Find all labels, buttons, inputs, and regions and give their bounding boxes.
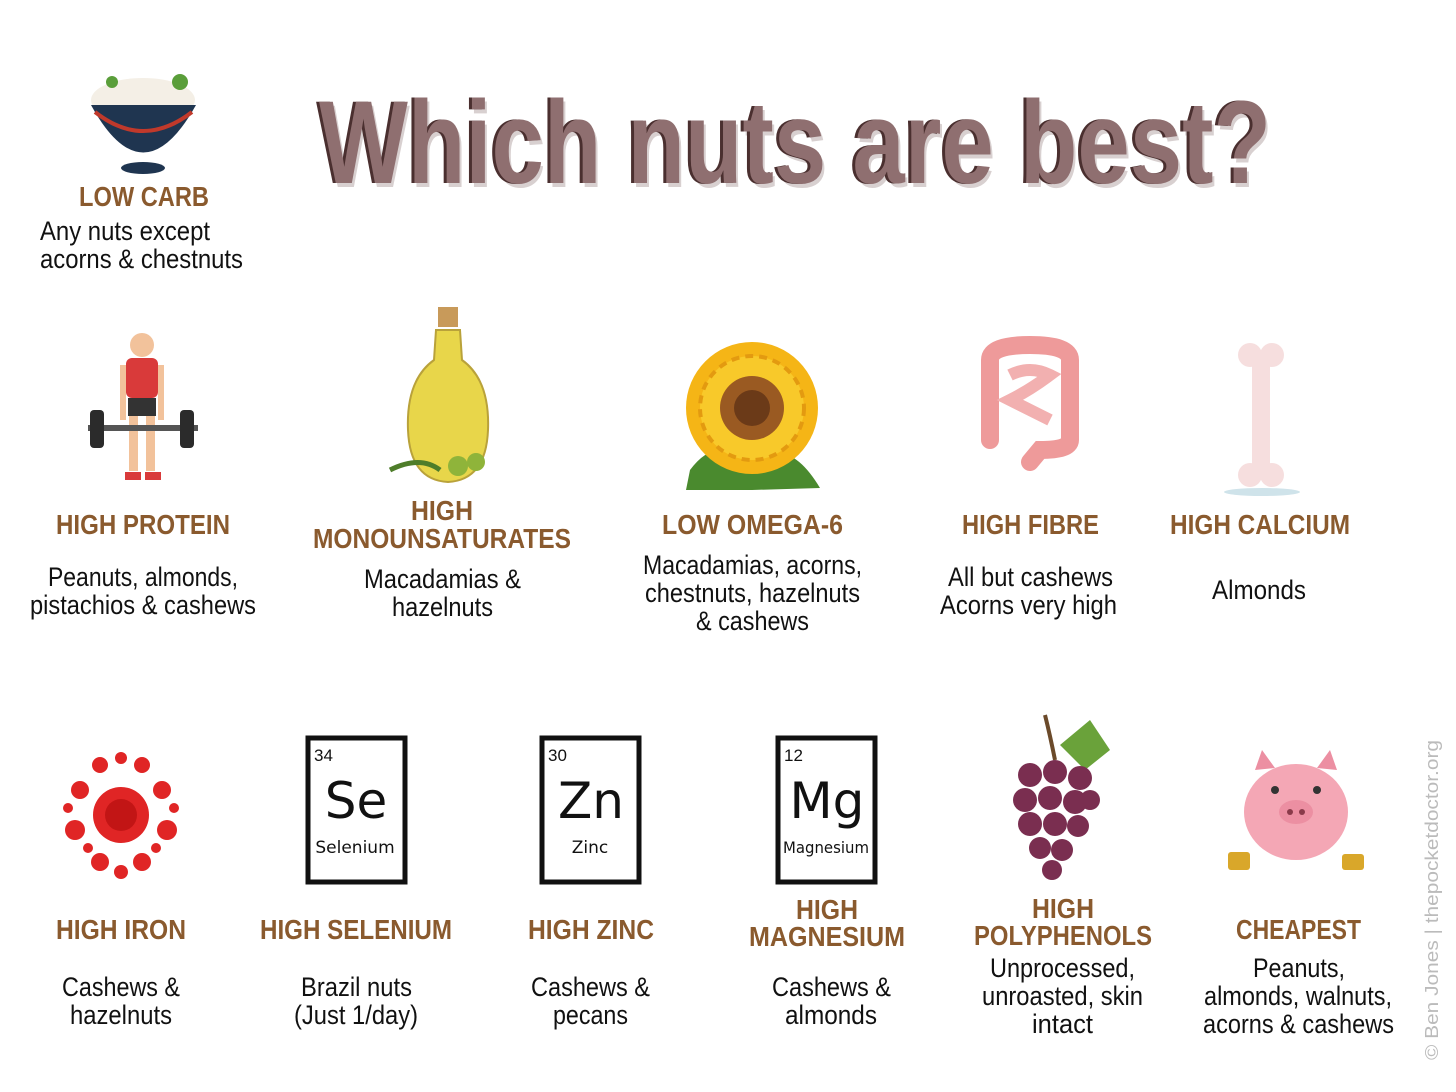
panel: high monounsaturates: Macadamias & — [364, 564, 521, 594]
panel: high fibre — [940, 345, 1117, 620]
panel: high monounsaturates: HIGH — [411, 495, 473, 526]
panel: low omega-6 — [643, 342, 862, 636]
panel: high selenium — [260, 738, 452, 1030]
icon: red blood cells — [63, 752, 179, 879]
panel: high protein: HIGH PROTEIN — [56, 509, 230, 540]
icon: element Mg — [778, 738, 875, 882]
panel: high protein — [30, 333, 256, 620]
panel: high zinc: Cashews & — [531, 972, 650, 1002]
panel: cheapest: Peanuts, — [1253, 953, 1345, 983]
panel: cheapest: almonds, walnuts, — [1204, 981, 1392, 1011]
panel: high iron: Cashews & — [62, 972, 180, 1002]
panel: high polyphenols: HIGH — [1032, 893, 1094, 924]
panel: high calcium — [1170, 343, 1350, 605]
panel: low omega-6: LOW OMEGA-6 — [662, 509, 843, 540]
icon: element Se — [308, 738, 405, 882]
panel: high polyphenols: POLYPHENOLS — [974, 920, 1152, 951]
panel: high iron: HIGH IRON — [56, 914, 186, 945]
icon: element Se: 34 — [314, 746, 333, 765]
icon: rice bowl — [91, 74, 196, 174]
panel: high fibre: HIGH FIBRE — [962, 509, 1099, 540]
icon: sunflower — [686, 342, 820, 490]
panel: high magnesium: HIGH — [796, 894, 858, 925]
panel: high monounsaturates — [313, 307, 571, 622]
panel: low carb: Any nuts except — [40, 216, 210, 246]
icon: element Zn: 30 — [548, 746, 567, 765]
panel: high iron: hazelnuts — [70, 1000, 172, 1030]
panel: high protein: pistachios & cashews — [30, 590, 256, 620]
panel: high selenium: (Just 1/day) — [294, 1000, 418, 1030]
panel: high polyphenols: Unprocessed, — [990, 953, 1135, 983]
panel: low omega-6: chestnuts, hazelnuts — [645, 578, 860, 608]
icon: element Se: Selenium — [315, 838, 395, 858]
icon: weightlifter — [88, 333, 198, 480]
icon: bone — [1224, 343, 1300, 496]
icon: grapes — [1013, 715, 1110, 880]
icon: element Mg: 12 — [784, 746, 803, 765]
panel: cheapest — [1203, 750, 1394, 1039]
panel: high zinc: pecans — [553, 1000, 628, 1030]
icon: element Zn: Zn — [558, 772, 624, 830]
icon: element Mg: Mg — [790, 772, 864, 830]
panel: high selenium: Brazil nuts — [301, 972, 412, 1002]
panel: high fibre: Acorns very high — [940, 590, 1117, 620]
panel: high zinc — [528, 738, 654, 1030]
panel: high magnesium: Cashews & — [772, 972, 891, 1002]
icon: element Mg: Magnesium — [783, 838, 869, 857]
panel: high fibre: All but cashews — [948, 562, 1113, 592]
panel: high selenium: HIGH SELENIUM — [260, 914, 452, 945]
panel: cheapest: acorns & cashews — [1203, 1009, 1394, 1039]
panel: high zinc: HIGH ZINC — [528, 914, 654, 945]
panel: high protein: Peanuts, almonds, — [48, 562, 238, 592]
panel: low carb: LOW CARB — [79, 181, 209, 212]
panel: high polyphenols: intact — [1032, 1009, 1093, 1039]
panel: low omega-6: & cashews — [696, 606, 809, 636]
icon: element Zn — [542, 738, 639, 882]
icon: olive oil bottle — [390, 307, 488, 482]
panel: low carb — [40, 74, 243, 274]
panel: high monounsaturates: MONOUNSATURATES — [313, 523, 571, 554]
panel: high magnesium: almonds — [785, 1000, 877, 1030]
panel: low omega-6: Macadamias, acorns, — [643, 550, 862, 580]
panel: high magnesium — [749, 738, 905, 1030]
panel: low carb: acorns & chestnuts — [40, 244, 243, 274]
watermark: © Ben Jones | thepocketdoctor.org — [1422, 740, 1442, 1060]
panel: high magnesium: MAGNESIUM — [749, 921, 905, 952]
icon: element Zn: Zinc — [572, 838, 608, 858]
icon: intestines — [990, 345, 1070, 462]
icon: piggy bank — [1228, 750, 1364, 870]
panel: cheapest: CHEAPEST — [1236, 914, 1361, 945]
panel: high monounsaturates: hazelnuts — [392, 592, 493, 622]
panel: high calcium: HIGH CALCIUM — [1170, 509, 1350, 540]
panel: high iron — [56, 752, 186, 1030]
icon: element Se: Se — [325, 772, 387, 830]
panel: high polyphenols — [974, 715, 1152, 1039]
panel: high polyphenols: unroasted, skin — [982, 981, 1143, 1011]
panel: high calcium: Almonds — [1212, 575, 1306, 605]
